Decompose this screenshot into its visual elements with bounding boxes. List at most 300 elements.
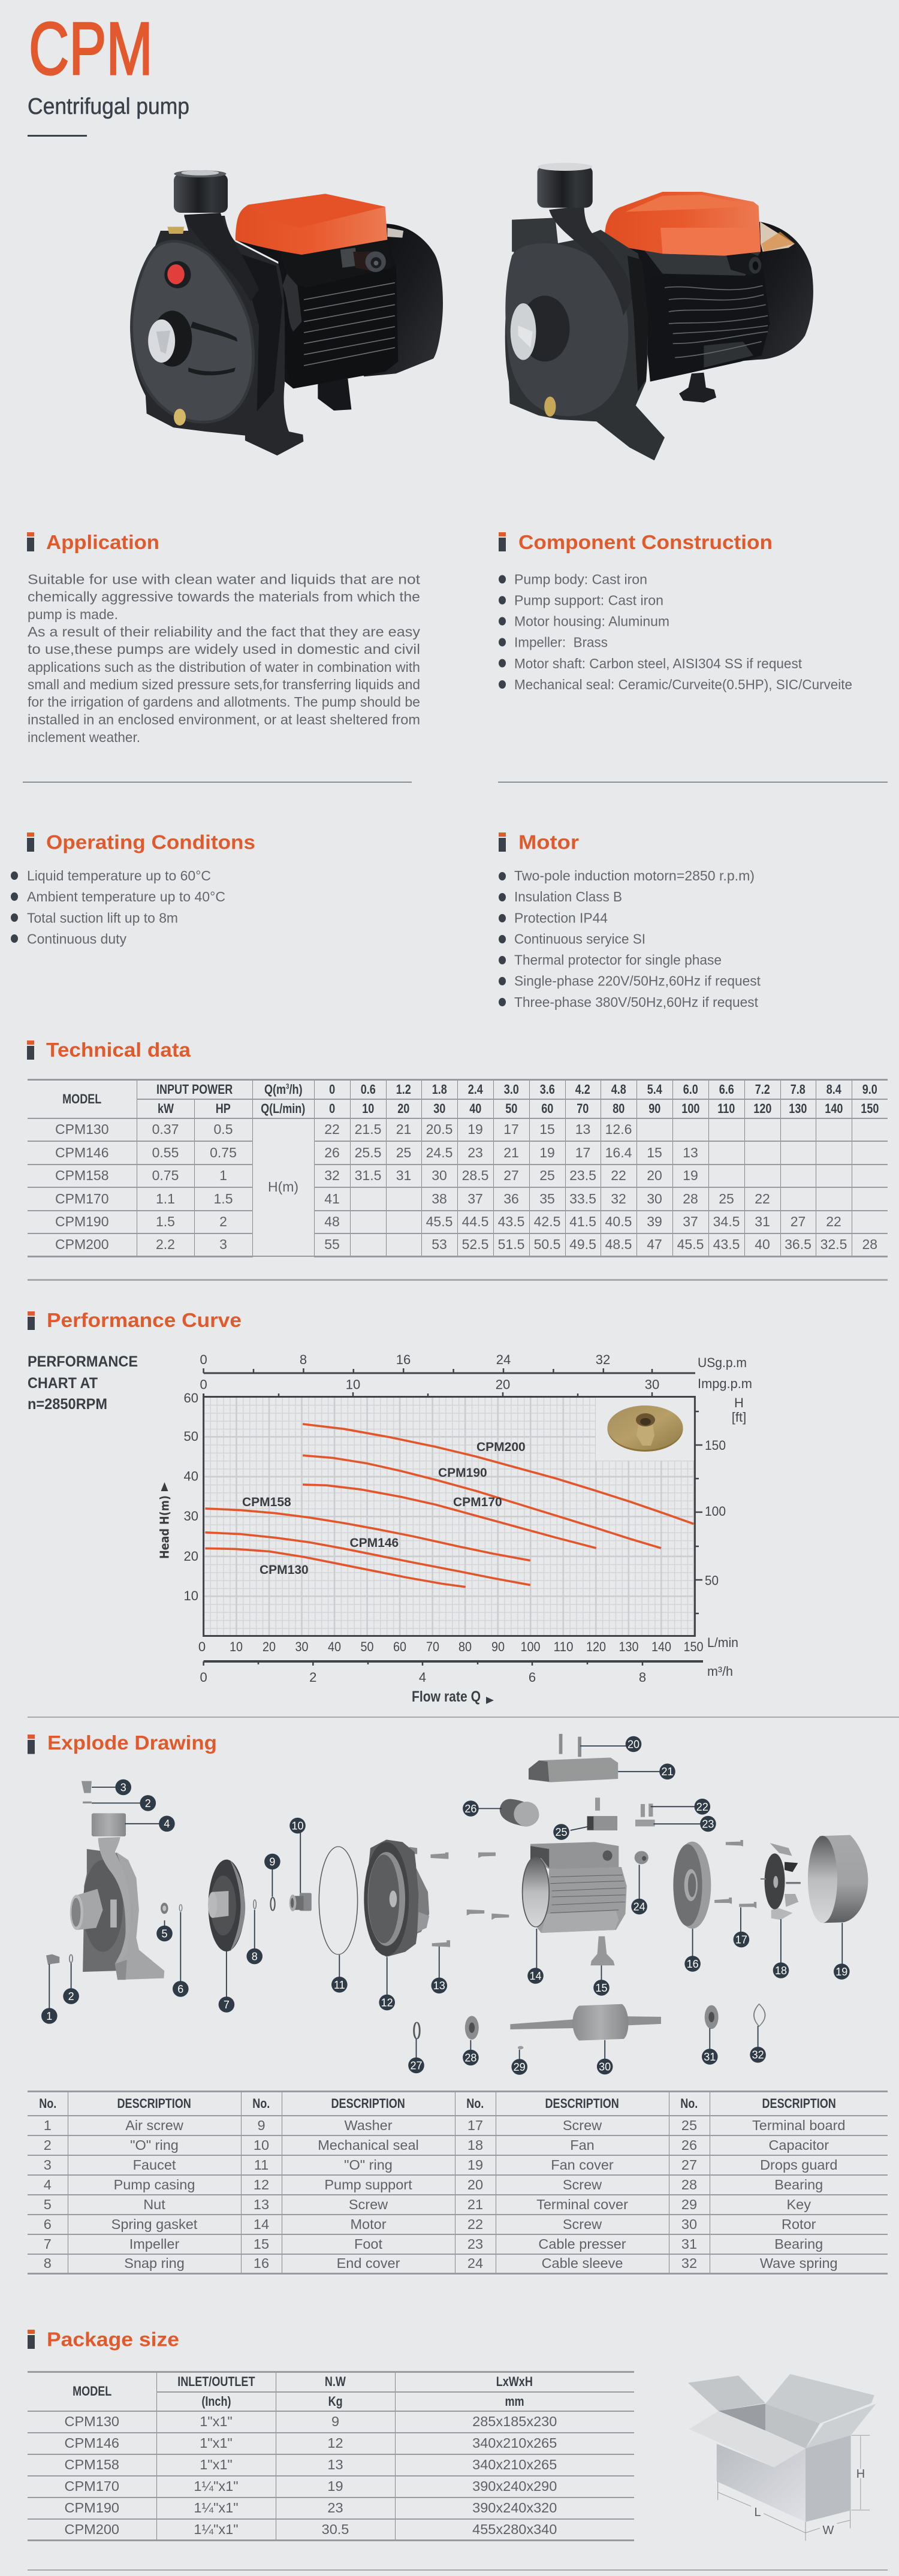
parts description table: 24 bbox=[467, 2255, 483, 2271]
part: rotor bbox=[510, 2004, 661, 2041]
technical data table: 6.6 bbox=[719, 1082, 734, 1097]
part numbers: 23 bbox=[702, 1818, 714, 1830]
technical data table: 23.5 bbox=[569, 1168, 596, 1183]
technical data table: 43.5 bbox=[713, 1236, 740, 1252]
parts description table: No. bbox=[680, 2096, 698, 2111]
package size table: CPM200 bbox=[65, 2521, 119, 2537]
package size table: 13 bbox=[327, 2457, 343, 2472]
parts description table: 13 bbox=[254, 2196, 269, 2212]
title: CPM bbox=[29, 8, 153, 91]
technical data table: 19 bbox=[683, 1168, 698, 1183]
chart note bbox=[28, 1353, 138, 1413]
parts description table: Impeller bbox=[129, 2236, 179, 2251]
part: impeller bbox=[208, 1860, 245, 1951]
left axis: head: 10 bbox=[184, 1588, 198, 1603]
technical data table: 17 bbox=[503, 1121, 519, 1137]
parts description table: 29 bbox=[681, 2196, 697, 2212]
list: operating conditions: Total suction lift up to 8m bbox=[27, 910, 178, 925]
technical data table: 19 bbox=[467, 1121, 483, 1137]
parts description table: Fan cover bbox=[551, 2156, 614, 2172]
parts description table: 6 bbox=[44, 2216, 52, 2232]
left axis: head: 20 bbox=[184, 1549, 198, 1564]
top axis: USg.p.m: 16 bbox=[396, 1352, 411, 1367]
bottom axis: L/min: 80 bbox=[458, 1639, 472, 1654]
parts description table: 8 bbox=[44, 2255, 52, 2271]
parts description table: 23 bbox=[467, 2236, 483, 2251]
part numbers: 25 bbox=[555, 1826, 568, 1838]
parts description table: 27 bbox=[681, 2156, 697, 2172]
technical data table: 40 bbox=[469, 1100, 481, 1116]
parts description table: Foot bbox=[354, 2236, 382, 2251]
performance curve chart bbox=[157, 1352, 752, 1705]
bottom axis: m3/h bbox=[200, 1664, 733, 1685]
list: motor: Single-phase 220V/50Hz,60Hz if request bbox=[514, 973, 761, 989]
package size table: 23 bbox=[327, 2500, 343, 2515]
list: motor: Three-phase 380V/50Hz,60Hz if request bbox=[514, 994, 759, 1010]
top axis: Impg.p.m: 30 bbox=[645, 1377, 659, 1392]
chart note: CHART AT bbox=[28, 1375, 98, 1392]
technical data table: 20 bbox=[397, 1100, 410, 1116]
text block: application description: to use,these pumps are widely used in domestic and civil bbox=[28, 641, 420, 657]
text block: application description: small and medium sized pressure sets,for transferring liquids and bbox=[28, 677, 420, 692]
part numbers bbox=[46, 1738, 847, 2073]
part numbers: 14 bbox=[529, 1970, 542, 1982]
part number badges bbox=[41, 1736, 850, 2075]
technical data table: Q(L/min) bbox=[261, 1100, 306, 1116]
parts description table: 32 bbox=[681, 2255, 697, 2271]
part: mechanical seal bbox=[289, 1893, 312, 1911]
package size table: 1"x1" bbox=[200, 2457, 233, 2472]
parts description table: No. bbox=[252, 2096, 270, 2111]
technical data table: 1 bbox=[219, 1168, 227, 1183]
part numbers: 30 bbox=[599, 2061, 611, 2073]
left axis: head: 50 bbox=[184, 1429, 198, 1444]
package size table: 1"x1" bbox=[200, 2414, 233, 2429]
parts description table: Screw bbox=[563, 2177, 602, 2192]
technical data table: 37 bbox=[467, 1191, 483, 1206]
box dimension labels bbox=[754, 2468, 865, 2537]
technical data table: 27 bbox=[503, 1168, 519, 1183]
list: component construction: Mechanical seal: Ceramic/Curveite(0.5HP), SIC/Curveite bbox=[514, 677, 852, 692]
bottom axis: L/min: 90 bbox=[491, 1639, 505, 1654]
part numbers: 5 bbox=[161, 1928, 168, 1939]
technical data table: 80 bbox=[613, 1100, 625, 1116]
curve labels: CPM158 bbox=[242, 1495, 291, 1509]
technical data table: 1.1 bbox=[156, 1191, 175, 1206]
technical data table: 36.5 bbox=[785, 1236, 811, 1252]
part: end cover bbox=[673, 1842, 711, 1929]
parts description table: 20 bbox=[467, 2177, 483, 2192]
curve labels: CPM170 bbox=[453, 1495, 502, 1509]
subtitle: Centrifugal pump bbox=[28, 94, 189, 119]
part numbers: 18 bbox=[775, 1965, 787, 1977]
part numbers: 8 bbox=[252, 1950, 258, 1962]
part numbers: 12 bbox=[381, 1997, 393, 2009]
technical data table: MODEL bbox=[62, 1091, 101, 1106]
package size table: N.W bbox=[325, 2374, 346, 2389]
parts description table: Bearing bbox=[774, 2177, 823, 2192]
technical data table: 1.5 bbox=[214, 1191, 233, 1206]
technical data table: 44.5 bbox=[462, 1214, 488, 1229]
parts description table: Key bbox=[786, 2196, 811, 2212]
top axis: Impg.p.m: 20 bbox=[496, 1377, 510, 1392]
right axis: feet: 100 bbox=[705, 1504, 726, 1519]
parts description table: "O" ring bbox=[130, 2137, 179, 2153]
bottom axis: m3/h: m³/h bbox=[707, 1664, 733, 1679]
part numbers: 31 bbox=[704, 2051, 716, 2063]
parts description table: 25 bbox=[681, 2117, 697, 2132]
list: motor bbox=[499, 868, 761, 1010]
technical data table: 0 bbox=[329, 1100, 335, 1116]
technical data table: 45.5 bbox=[426, 1214, 452, 1229]
technical data table: 110 bbox=[717, 1100, 735, 1116]
technical data table: HP bbox=[216, 1100, 231, 1116]
part: capacitor bbox=[500, 1799, 539, 1826]
technical data table: 36 bbox=[503, 1191, 519, 1206]
technical data table: 40.5 bbox=[605, 1214, 632, 1229]
part numbers: 4 bbox=[164, 1818, 170, 1830]
package size table: LxWxH bbox=[496, 2374, 533, 2389]
parts description table: 5 bbox=[44, 2196, 52, 2212]
technical data table: 10 bbox=[362, 1100, 374, 1116]
bottom axis: L/min: 20 bbox=[263, 1639, 276, 1654]
technical data table: H(m) bbox=[268, 1179, 298, 1195]
technical data table: CPM158 bbox=[55, 1168, 108, 1183]
parts description table: 30 bbox=[681, 2216, 697, 2232]
technical data table: 140 bbox=[825, 1100, 843, 1116]
technical data table: 32 bbox=[324, 1168, 340, 1183]
part numbers: 7 bbox=[224, 1999, 230, 2011]
technical data table: 35 bbox=[539, 1191, 555, 1206]
parts description table: Screw bbox=[563, 2216, 602, 2232]
technical data table: 52.5 bbox=[462, 1236, 488, 1252]
package size table: CPM170 bbox=[65, 2478, 119, 2494]
text block: application description: inclement weather. bbox=[28, 729, 140, 745]
package size table: (Inch) bbox=[201, 2394, 231, 2408]
curve labels bbox=[242, 1440, 526, 1577]
parts description table: 11 bbox=[254, 2156, 269, 2172]
technical data table: 45.5 bbox=[677, 1236, 704, 1252]
package size table: 340x210x265 bbox=[472, 2435, 557, 2451]
list: component construction: Pump body: Cast iron bbox=[514, 572, 647, 587]
technical data table: 19 bbox=[539, 1145, 555, 1160]
package size table: 455x280x340 bbox=[472, 2521, 557, 2537]
technical data table: 25.5 bbox=[355, 1145, 381, 1160]
package size table: 1"x1" bbox=[200, 2435, 233, 2451]
parts description table: Faucet bbox=[133, 2156, 176, 2172]
parts description table bbox=[28, 2091, 888, 2275]
technical data table bbox=[28, 1079, 888, 1257]
package size table: CPM190 bbox=[65, 2500, 119, 2515]
parts description table: 2 bbox=[44, 2137, 52, 2153]
parts description table: 21 bbox=[467, 2196, 483, 2212]
right axis: feet: 50 bbox=[705, 1573, 719, 1588]
heading: Technical data: Technical data bbox=[46, 1039, 191, 1061]
parts description table: 15 bbox=[254, 2236, 269, 2251]
chart note: n=2850RPM bbox=[28, 1396, 107, 1413]
technical data table: 90 bbox=[648, 1100, 660, 1116]
technical data table: 39 bbox=[647, 1214, 662, 1229]
part numbers: 1 bbox=[46, 2010, 52, 2022]
technical data table: 0.37 bbox=[152, 1121, 179, 1137]
exploded parts: right group bbox=[467, 1797, 868, 1965]
left axis: head: 30 bbox=[184, 1509, 198, 1524]
package size table: 285x185x230 bbox=[472, 2414, 557, 2429]
bottom axis: L/min: 60 bbox=[393, 1639, 406, 1654]
parts description table: No. bbox=[466, 2096, 484, 2111]
technical data table: 53 bbox=[432, 1236, 447, 1252]
part numbers: 2 bbox=[68, 1990, 74, 2002]
technical data table: 2 bbox=[219, 1214, 227, 1229]
curve labels: CPM190 bbox=[438, 1466, 487, 1480]
part: foot bbox=[590, 1936, 615, 1965]
list: operating conditions: Liquid temperature up to 60°C bbox=[27, 868, 211, 883]
curve labels: CPM146 bbox=[350, 1536, 399, 1550]
technical data table: 4.8 bbox=[611, 1082, 626, 1097]
technical data table: 42.5 bbox=[534, 1214, 560, 1229]
part numbers: 11 bbox=[334, 1979, 345, 1991]
top axis: Impg.p.m: 10 bbox=[346, 1377, 360, 1392]
technical data table: 30 bbox=[432, 1168, 447, 1183]
technical data table: 50 bbox=[505, 1100, 517, 1116]
top axis: USg.p.m: 0 bbox=[200, 1352, 207, 1367]
heading: Motor: Motor bbox=[518, 831, 579, 853]
technical data table: 3.0 bbox=[503, 1082, 519, 1097]
package size table bbox=[28, 2371, 634, 2541]
parts description table: 10 bbox=[254, 2137, 269, 2153]
list: motor: Insulation Class B bbox=[514, 889, 622, 904]
technical data table: 3.6 bbox=[539, 1082, 555, 1097]
box dimension lines bbox=[718, 2435, 870, 2541]
parts description table: DESCRIPTION bbox=[331, 2096, 405, 2111]
bottom axis: m3/h: 8 bbox=[639, 1670, 646, 1685]
parts description table: Snap ring bbox=[124, 2255, 185, 2271]
bottom axis: L/min: 100 bbox=[520, 1639, 541, 1654]
technical data table: 8.4 bbox=[826, 1082, 841, 1097]
parts description table: 17 bbox=[467, 2117, 483, 2132]
parts description table: Pump support bbox=[324, 2177, 412, 2192]
text block: application description: pump is made. bbox=[28, 607, 118, 622]
right axis: feet: H bbox=[734, 1395, 744, 1410]
technical data table: 43.5 bbox=[498, 1214, 524, 1229]
technical data table: 13 bbox=[575, 1121, 590, 1137]
technical data table: 20.5 bbox=[426, 1121, 452, 1137]
list: component construction: Pump support: Cast iron bbox=[514, 592, 663, 608]
technical data table: 26 bbox=[324, 1145, 340, 1160]
technical data table: 38 bbox=[432, 1191, 447, 1206]
package size table: INLET/OUTLET bbox=[177, 2374, 255, 2389]
part: motor bbox=[523, 1842, 627, 1933]
technical data table: 22 bbox=[611, 1168, 626, 1183]
technical data table: 120 bbox=[753, 1100, 771, 1116]
list: component construction: Impeller: Brass bbox=[514, 634, 608, 650]
technical data table: 31 bbox=[396, 1168, 411, 1183]
part numbers: 2 bbox=[145, 1797, 151, 1809]
technical data table: 16.4 bbox=[605, 1145, 632, 1160]
technical data table: 4.2 bbox=[575, 1082, 590, 1097]
package size table: CPM146 bbox=[65, 2435, 119, 2451]
list: operating conditions: Ambient temperature up to 40°C bbox=[27, 889, 225, 904]
text block: application description: applications such as the distribution of water in combination with bbox=[28, 659, 420, 675]
top axis: USg.p.m bbox=[200, 1352, 747, 1370]
left axis: head: 60 bbox=[184, 1390, 198, 1405]
parts description table: Wave spring bbox=[760, 2255, 838, 2271]
parts description table: 3 bbox=[44, 2156, 52, 2172]
part numbers: 16 bbox=[687, 1958, 699, 1970]
part numbers: 27 bbox=[410, 2059, 423, 2071]
box dimension labels: L bbox=[754, 2506, 761, 2519]
technical data table: 21.5 bbox=[355, 1121, 381, 1137]
right axis: feet bbox=[705, 1395, 746, 1588]
list: motor: Two-pole induction motorn=2850 r.p.m) bbox=[514, 868, 755, 883]
technical data table: 2.4 bbox=[467, 1082, 483, 1097]
parts description table: Terminal board bbox=[752, 2117, 845, 2132]
technical data table: 30 bbox=[433, 1100, 445, 1116]
technical data table: 47 bbox=[647, 1236, 662, 1252]
parts description table: Washer bbox=[344, 2117, 393, 2132]
technical data table: 27 bbox=[791, 1214, 806, 1229]
left axis: head: 40 bbox=[184, 1468, 198, 1484]
bottom axis: L/min: 140 bbox=[651, 1639, 671, 1654]
parts description table: "O" ring bbox=[344, 2156, 393, 2172]
package size table: CPM130 bbox=[65, 2414, 119, 2429]
box dimension labels: H bbox=[856, 2468, 865, 2481]
parts description table: 19 bbox=[467, 2156, 483, 2172]
technical data table: 23 bbox=[467, 1145, 483, 1160]
bottom axis: L/min: 150 bbox=[683, 1639, 704, 1654]
technical data table: 13 bbox=[683, 1145, 698, 1160]
parts description table: Rotor bbox=[782, 2216, 816, 2232]
technical data table: 2.2 bbox=[156, 1236, 175, 1252]
technical data table: 48.5 bbox=[605, 1236, 632, 1252]
technical data table: 21 bbox=[503, 1145, 519, 1160]
bottom axis: L/min: 0 bbox=[198, 1639, 206, 1654]
technical data table: Q(m3/h) bbox=[264, 1082, 302, 1097]
title rule bbox=[28, 135, 87, 137]
list: component construction bbox=[499, 572, 852, 692]
part numbers: 9 bbox=[269, 1856, 275, 1868]
parts description table: Cable presser bbox=[538, 2236, 626, 2251]
text block: application description: for the irrigation of gardens and allotments. The pump should be bbox=[28, 694, 420, 710]
heading: Application: Application bbox=[46, 531, 159, 553]
package size table: 30.5 bbox=[322, 2521, 349, 2537]
package size table: Kg bbox=[328, 2394, 343, 2408]
bottom axis: m3/h: 0 bbox=[200, 1670, 207, 1685]
bottom axis: L/min: 40 bbox=[328, 1639, 341, 1654]
bottom axis: m3/h: 4 bbox=[419, 1670, 426, 1685]
technical data table: CPM130 bbox=[55, 1121, 108, 1137]
pump photo: front left view bbox=[131, 170, 443, 456]
technical data table: 25 bbox=[396, 1145, 411, 1160]
bottom axis: m3/h: 6 bbox=[529, 1670, 536, 1685]
technical data table: 7.2 bbox=[755, 1082, 770, 1097]
part: pump casing bbox=[70, 1813, 164, 1980]
part numbers: 10 bbox=[291, 1820, 304, 1832]
parts description table: Pump casing bbox=[114, 2177, 195, 2192]
bottom axis: L/min: 50 bbox=[361, 1639, 374, 1654]
part: fan bbox=[761, 1843, 801, 1920]
part numbers: 22 bbox=[696, 1801, 708, 1813]
part numbers: 29 bbox=[514, 2061, 526, 2073]
technical data table: 33.5 bbox=[569, 1191, 596, 1206]
bottom axis: L/min: 10 bbox=[230, 1639, 243, 1654]
parts description table: Motor bbox=[350, 2216, 387, 2232]
bottom axis: L/min: L/min bbox=[707, 1635, 738, 1650]
technical data table: 3 bbox=[219, 1236, 227, 1252]
package size table: mm bbox=[505, 2394, 524, 2408]
heading: Component Construction: Component Construction bbox=[518, 531, 773, 553]
parts description table: Cable sleeve bbox=[542, 2255, 623, 2271]
technical data table: 28 bbox=[683, 1191, 698, 1206]
right axis: feet: 150 bbox=[705, 1438, 726, 1453]
package size table: 340x210x265 bbox=[472, 2457, 557, 2472]
chart note: PERFORMANCE bbox=[28, 1353, 138, 1370]
top axis: USg.p.m: 24 bbox=[496, 1352, 511, 1367]
technical data table: 41 bbox=[324, 1191, 340, 1206]
bottom axis: L/min: 120 bbox=[586, 1639, 606, 1654]
text block: application description: As a result of their reliability and the fact that they are easy bbox=[28, 624, 421, 640]
parts description table: 22 bbox=[467, 2216, 483, 2232]
top axis: USg.p.m: 32 bbox=[596, 1352, 610, 1367]
impeller inset bbox=[596, 1398, 694, 1461]
parts description table: 31 bbox=[681, 2236, 697, 2251]
technical data table: 40 bbox=[755, 1236, 770, 1252]
part numbers: 20 bbox=[628, 1738, 639, 1750]
technical data table: 28.5 bbox=[462, 1168, 488, 1183]
technical data table: CPM146 bbox=[55, 1145, 108, 1160]
technical data table: 0.75 bbox=[152, 1168, 179, 1183]
technical data table: INPUT POWER bbox=[156, 1082, 233, 1097]
technical data table: 9.0 bbox=[862, 1082, 877, 1097]
technical data table: 25 bbox=[719, 1191, 734, 1206]
package size table: 9 bbox=[331, 2414, 339, 2429]
technical data table: CPM170 bbox=[55, 1191, 108, 1206]
package size table: 1¼"x1" bbox=[194, 2500, 239, 2515]
performance curves bbox=[205, 1424, 693, 1587]
part: terminal board bbox=[587, 1816, 617, 1830]
box dimension labels: W bbox=[823, 2524, 834, 2537]
part: terminal cover bbox=[529, 1757, 618, 1782]
text block: application description: installed in an enclosed environment, or at least sheltered from bbox=[28, 712, 420, 728]
heading: Motor bbox=[499, 831, 579, 853]
package size table: 1¼"x1" bbox=[194, 2521, 239, 2537]
package size table: MODEL bbox=[73, 2384, 111, 2399]
technical data table: 22 bbox=[755, 1191, 770, 1206]
technical data table: 1.2 bbox=[396, 1082, 411, 1097]
parts description table: DESCRIPTION bbox=[762, 2096, 835, 2111]
technical data table: 100 bbox=[681, 1100, 699, 1116]
top axis: USg.p.m: USg.p.m bbox=[698, 1355, 747, 1370]
parts description table: Screw bbox=[349, 2196, 388, 2212]
bottom axis title: Flow rate Q bbox=[412, 1688, 481, 1705]
curve labels: CPM130 bbox=[260, 1563, 309, 1577]
technical data table: 30 bbox=[647, 1191, 662, 1206]
bottom axis: L/min: 130 bbox=[619, 1639, 639, 1654]
technical data table: 34.5 bbox=[713, 1214, 740, 1229]
technical data table: CPM200 bbox=[55, 1236, 108, 1252]
parts description table: 16 bbox=[254, 2255, 269, 2271]
parts description table: Bearing bbox=[774, 2236, 823, 2251]
technical data table: 28 bbox=[862, 1236, 877, 1252]
technical data table: 15 bbox=[647, 1145, 662, 1160]
technical data table: 31.5 bbox=[355, 1168, 381, 1183]
top axis: Impg.p.m: Impg.p.m bbox=[698, 1376, 752, 1391]
part numbers: 21 bbox=[661, 1766, 674, 1778]
part numbers: 3 bbox=[120, 1781, 126, 1793]
technical data table: 31 bbox=[755, 1214, 770, 1229]
part: fan cover bbox=[808, 1835, 868, 1923]
parts description table: 12 bbox=[254, 2177, 269, 2192]
